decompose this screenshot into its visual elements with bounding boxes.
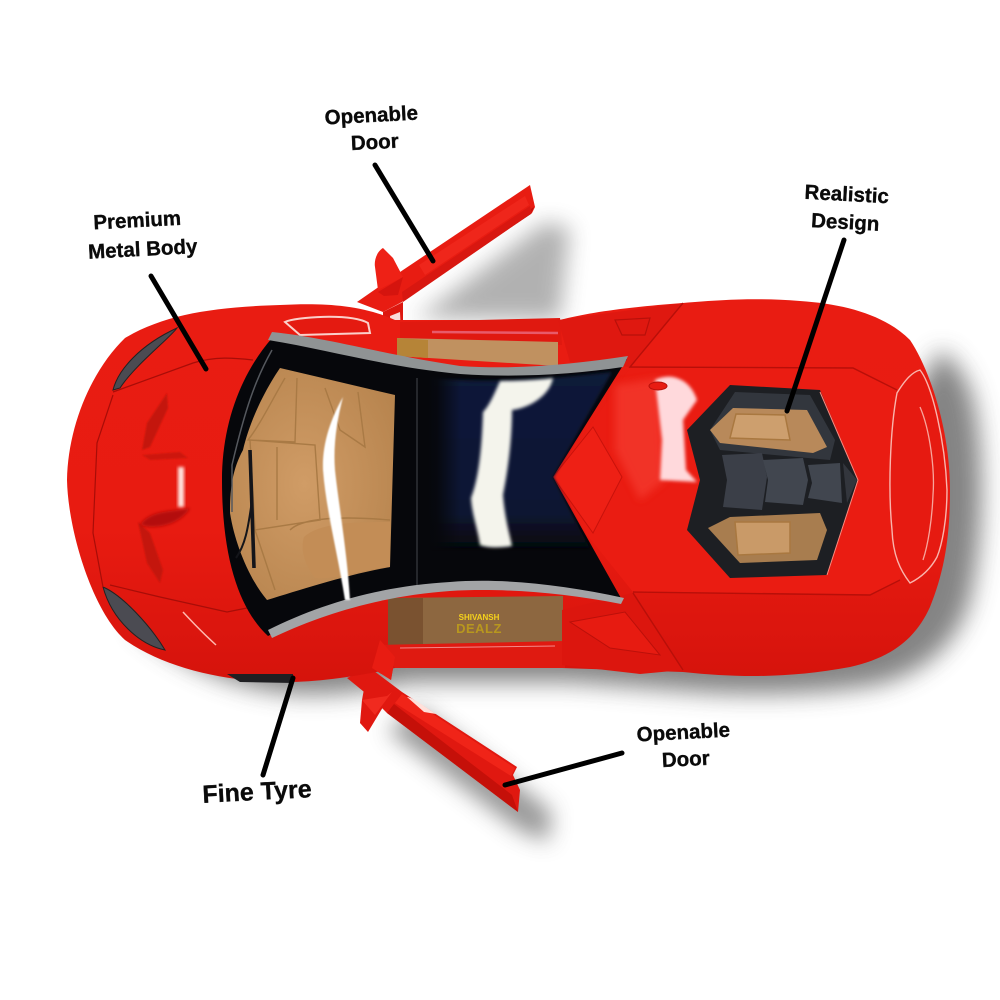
rear deck xyxy=(560,368,903,595)
headlights xyxy=(113,328,177,390)
car shadow xyxy=(130,222,982,842)
brand logo: SHIVANSH xyxy=(459,613,500,622)
rear side panels xyxy=(558,303,683,367)
top sill and interior xyxy=(400,318,562,345)
car body xyxy=(67,299,950,683)
lower door xyxy=(347,640,520,812)
bottom interior and sill xyxy=(388,596,563,645)
roof glass xyxy=(430,372,612,548)
engine bay xyxy=(687,385,858,578)
brand logo: DEALZ xyxy=(456,621,502,636)
label: premium metal body: Metal Body xyxy=(88,235,199,264)
arrow: upper door xyxy=(375,165,433,261)
hood lines and vents xyxy=(93,358,253,612)
arrow: lower door xyxy=(505,753,622,785)
door mirrors and hinges xyxy=(285,317,370,335)
upper door xyxy=(357,185,535,345)
label: openable door bottom: Door xyxy=(661,747,710,772)
label: openable door top: Openable xyxy=(324,102,419,129)
label: realistic design: Design xyxy=(811,209,880,236)
brand logo xyxy=(456,613,502,636)
tyre xyxy=(227,674,293,683)
cockpit interior xyxy=(230,350,395,600)
red diamond panel xyxy=(553,427,622,533)
arrow: fine tyre xyxy=(263,678,293,775)
windscreen and roof xyxy=(222,332,628,638)
rear vent xyxy=(890,370,947,583)
label: fine tyre: Fine Tyre xyxy=(202,775,312,809)
arrow: realistic design xyxy=(787,240,844,411)
label: openable door top: Door xyxy=(350,130,399,155)
label: realistic design: Realistic xyxy=(804,181,889,208)
arrow: metal body xyxy=(151,276,206,369)
label: openable door bottom: Openable xyxy=(636,719,731,746)
callout lines xyxy=(151,165,844,785)
label: premium metal body: Premium xyxy=(93,207,182,234)
highlights on rear deck xyxy=(615,378,665,500)
